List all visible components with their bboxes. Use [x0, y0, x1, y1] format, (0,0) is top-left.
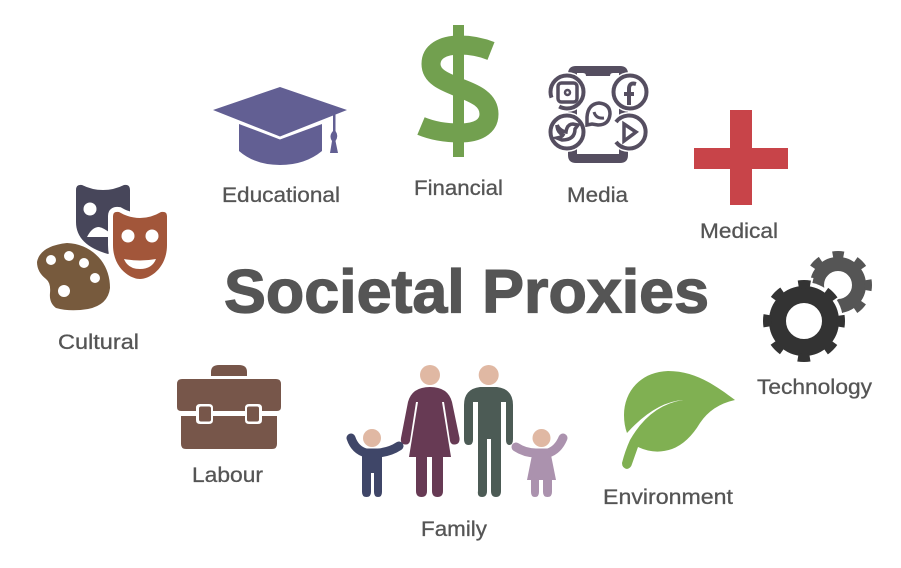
- icon: masks and palette: [37, 185, 167, 310]
- icon: social media phone: [550, 66, 646, 163]
- twitter circle: [550, 116, 584, 148]
- icon: briefcase: [177, 365, 281, 449]
- icon: family: [351, 365, 563, 497]
- whatsapp bubble: [583, 99, 613, 129]
- icon: dollar sign: [421, 25, 491, 157]
- happy mask: [113, 212, 167, 279]
- sad mask: [76, 185, 130, 254]
- boy: [351, 429, 399, 497]
- large gear: [767, 284, 841, 358]
- facebook circle: [614, 76, 646, 108]
- man: [464, 365, 513, 497]
- icon: leaf: [622, 371, 735, 469]
- small gear: [808, 254, 868, 316]
- label: educational: Educational: [222, 183, 340, 207]
- icon: medical cross: [694, 110, 788, 205]
- label: medical: Medical: [700, 219, 778, 243]
- girl: [516, 429, 563, 497]
- label: environment: Environment: [603, 485, 733, 509]
- palette: [37, 243, 110, 310]
- icon: gears: [764, 254, 868, 361]
- title: Societal Proxies: [224, 258, 709, 326]
- label: technology: Technology: [757, 375, 872, 399]
- woman: [401, 365, 460, 497]
- icon: graduation cap: [213, 87, 347, 165]
- instagram circle: [550, 76, 584, 108]
- label: financial: Financial: [414, 176, 503, 200]
- play circle: [612, 116, 646, 148]
- label: cultural: Cultural: [58, 330, 139, 354]
- label: media: Media: [567, 183, 628, 207]
- label: family: Family: [421, 517, 487, 541]
- phone body: [568, 66, 628, 163]
- label: labour: Labour: [192, 463, 263, 487]
